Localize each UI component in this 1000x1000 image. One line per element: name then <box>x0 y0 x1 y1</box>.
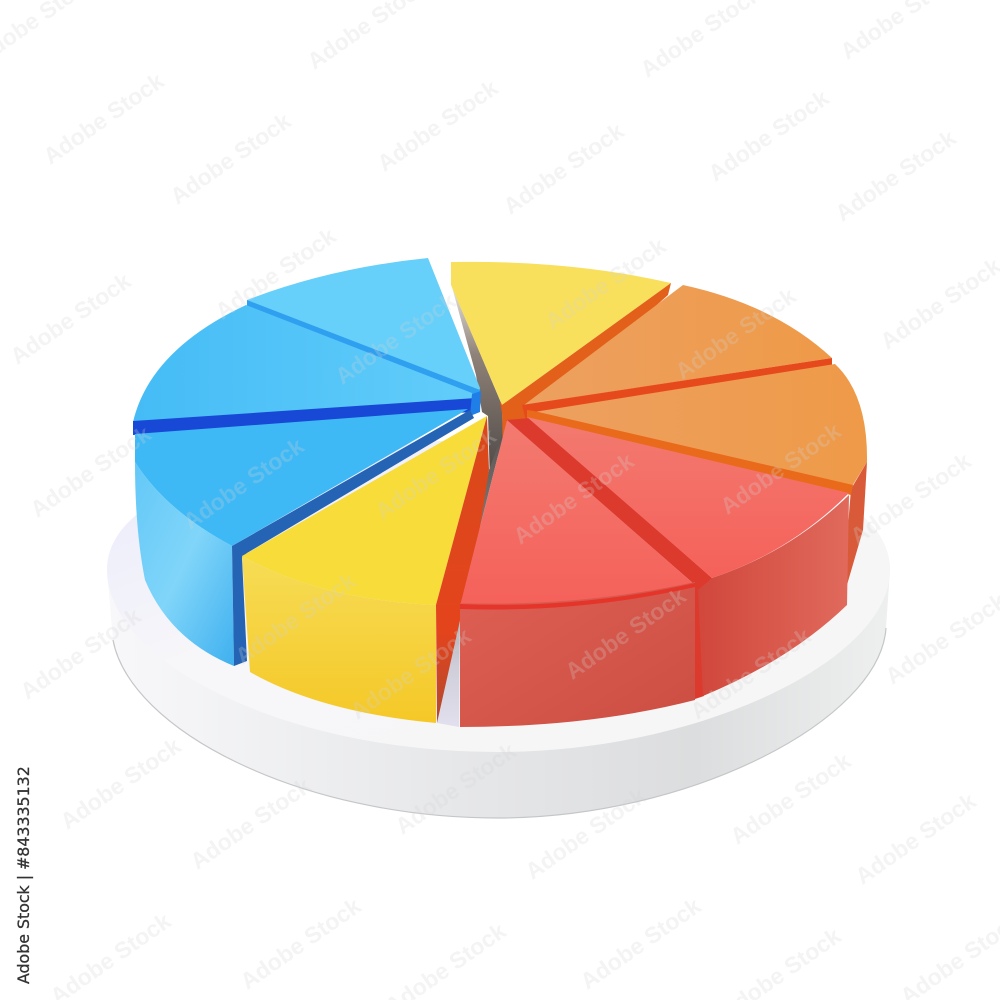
stock credit text: Adobe Stock | #843335132 <box>14 766 33 984</box>
watermark pattern: Adobe Stock <box>508 447 639 549</box>
slice: blue upper left <box>133 305 481 435</box>
base plate <box>107 440 890 818</box>
watermark pattern: Adobe Stock <box>185 772 316 874</box>
watermark pattern: Adobe Stock <box>845 447 976 549</box>
watermark pattern: Adobe Stock <box>390 737 521 839</box>
watermark pattern: Adobe Stock <box>520 782 651 884</box>
watermark pattern: Adobe Stock <box>560 582 691 684</box>
slice: blue top <box>247 258 480 398</box>
watermark pattern: Adobe Stock <box>370 422 501 524</box>
watermark pattern: Adobe Stock <box>703 84 834 186</box>
watermark pattern: Adobe Stock <box>178 432 309 534</box>
slice: blue lower left <box>135 409 474 666</box>
watermark pattern: Adobe Stock <box>575 892 706 994</box>
watermark pattern: Adobe Stock <box>25 420 156 522</box>
slice: yellow top <box>451 262 671 470</box>
watermark pattern: Adobe Stock <box>330 287 461 389</box>
watermark pattern: Adobe Stock <box>5 267 136 369</box>
watermark pattern: Adobe Stock <box>540 232 671 334</box>
watermark pattern: Adobe Stock <box>210 222 341 324</box>
watermark pattern: Adobe Stock <box>55 732 186 834</box>
watermark pattern: Adobe Stock <box>715 417 846 519</box>
watermark pattern: Adobe Stock <box>165 107 296 209</box>
slice: red right <box>506 417 849 699</box>
slice: orange lower <box>527 364 867 602</box>
watermark pattern: Adobe Stock <box>670 282 801 384</box>
slice: red front <box>460 420 695 727</box>
watermark pattern: Adobe Stock <box>725 747 856 849</box>
watermark pattern: Adobe Stock <box>345 622 476 724</box>
watermark pattern: Adobe Stock <box>235 892 366 994</box>
watermark pattern: Adobe Stock <box>38 67 169 169</box>
gaps between slices <box>437 287 545 727</box>
watermark pattern: Adobe Stock <box>685 622 816 724</box>
slice: yellow front <box>242 416 489 723</box>
watermark pattern: Adobe Stock <box>498 117 629 219</box>
watermark pattern: Adobe Stock <box>372 74 503 176</box>
watermark pattern: Adobe Stock <box>830 124 961 226</box>
watermark pattern: Adobe Stock <box>230 567 361 669</box>
watermark pattern: Adobe Stock <box>850 787 981 889</box>
slice: orange upper <box>522 285 832 425</box>
watermark pattern: Adobe Stock <box>15 602 146 704</box>
